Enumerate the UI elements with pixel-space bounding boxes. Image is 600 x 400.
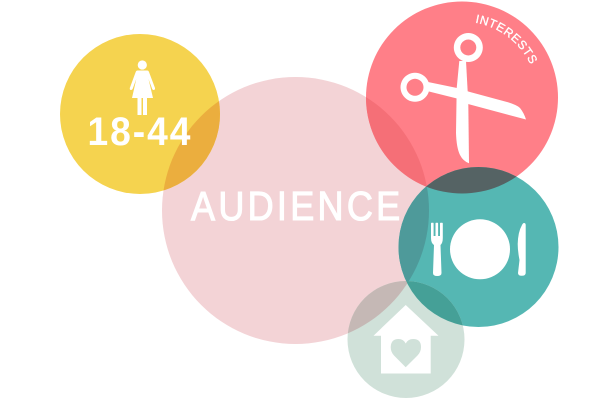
interests label: INTERESTS bbox=[476, 14, 537, 64]
overlap: interests and audience bbox=[366, 98, 427, 187]
icon: house with heart bbox=[374, 305, 438, 374]
circle: audience bbox=[162, 77, 429, 344]
icon: scissors bbox=[401, 33, 526, 163]
icon: woman bbox=[130, 60, 155, 115]
overlap: dining and audience bbox=[398, 186, 429, 281]
circle: interests bbox=[366, 2, 558, 194]
overlap: interests and dining bbox=[426, 167, 516, 194]
icon: plate bbox=[450, 219, 510, 279]
circle: age group bbox=[60, 34, 220, 194]
overlap: age and audience bbox=[164, 101, 220, 190]
circle: home bbox=[348, 281, 464, 398]
overlap: dining and home bbox=[406, 281, 463, 326]
icon: knife bbox=[518, 223, 526, 276]
circle: dining bbox=[398, 167, 558, 327]
icon: fork bbox=[431, 223, 443, 276]
overlap: home and audience bbox=[348, 281, 408, 334]
age label: 18-44 bbox=[88, 110, 192, 154]
title: audience: AUDIENCE bbox=[191, 184, 403, 230]
